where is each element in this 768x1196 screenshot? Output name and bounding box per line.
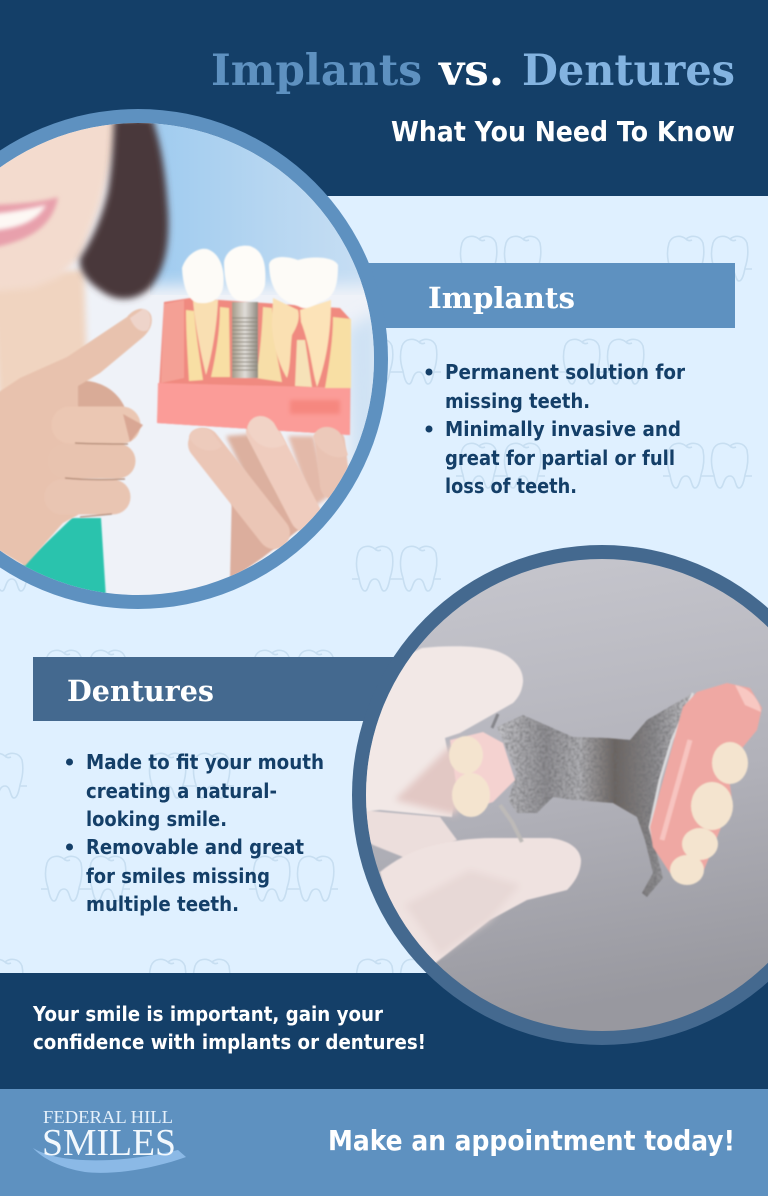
glove fingers [360, 810, 457, 857]
closing message [32, 1002, 426, 1054]
tooth background pattern [0, 236, 752, 1004]
bullet list: implants [426, 360, 685, 498]
bullet list: implants: loss of teeth. [445, 474, 577, 498]
bullet list: dentures: looking smile. [86, 807, 227, 831]
title [211, 46, 735, 96]
closing message: Your smile is important, gain your [32, 1002, 383, 1026]
logo: Federal Hill Smiles: FEDERAL HILL [43, 1107, 173, 1127]
closing message band [0, 973, 768, 1089]
title: Implants [211, 46, 422, 96]
bullet list: dentures: multiple teeth. [86, 892, 239, 916]
closing message: confidence with implants or dentures! [33, 1030, 426, 1054]
bullet list: dentures: for smiles missing [86, 864, 270, 888]
denture metal frame [497, 693, 693, 897]
face [0, 115, 118, 292]
bullet list: dentures [66, 750, 324, 916]
header band [0, 0, 768, 196]
pointing hand [0, 309, 152, 566]
denture acrylic [450, 732, 515, 813]
banner: dentures [33, 657, 398, 721]
subtitle: What You Need To Know [391, 115, 735, 148]
footer band [0, 1089, 768, 1196]
fingertips over block [189, 416, 348, 457]
title: vs. [438, 46, 504, 96]
model teeth [193, 300, 218, 375]
banner: implants [360, 263, 735, 328]
photo: partial denture in gloved hand [352, 545, 768, 1045]
banner: implants: Implants [428, 281, 575, 315]
bullet list: dentures: creating a natural- [86, 779, 277, 803]
title: Dentures [522, 46, 735, 96]
smile [0, 197, 58, 248]
bullet list: implants: great for partial or full [445, 446, 675, 470]
bullet list: implants: Minimally invasive and [445, 417, 681, 441]
neck [0, 267, 91, 392]
bullet list: implants: missing teeth. [445, 389, 590, 413]
bullet list: implants: Permanent solution for [445, 360, 685, 384]
implant post [232, 302, 258, 378]
denture teeth [449, 736, 748, 885]
bone [186, 310, 203, 381]
holding fingers [204, 431, 335, 580]
bullet list: dentures: Made to fit your mouth [86, 750, 324, 774]
logo: Federal Hill Smiles [33, 1107, 186, 1173]
bullet list: dentures: Removable and great [86, 835, 304, 859]
photo: woman holding implant model [0, 109, 390, 609]
teal top [20, 518, 106, 598]
hair [80, 118, 168, 299]
banner: dentures: Dentures [67, 674, 214, 708]
gum block [157, 246, 351, 435]
logo: Federal Hill Smiles: SMILES [42, 1122, 176, 1164]
